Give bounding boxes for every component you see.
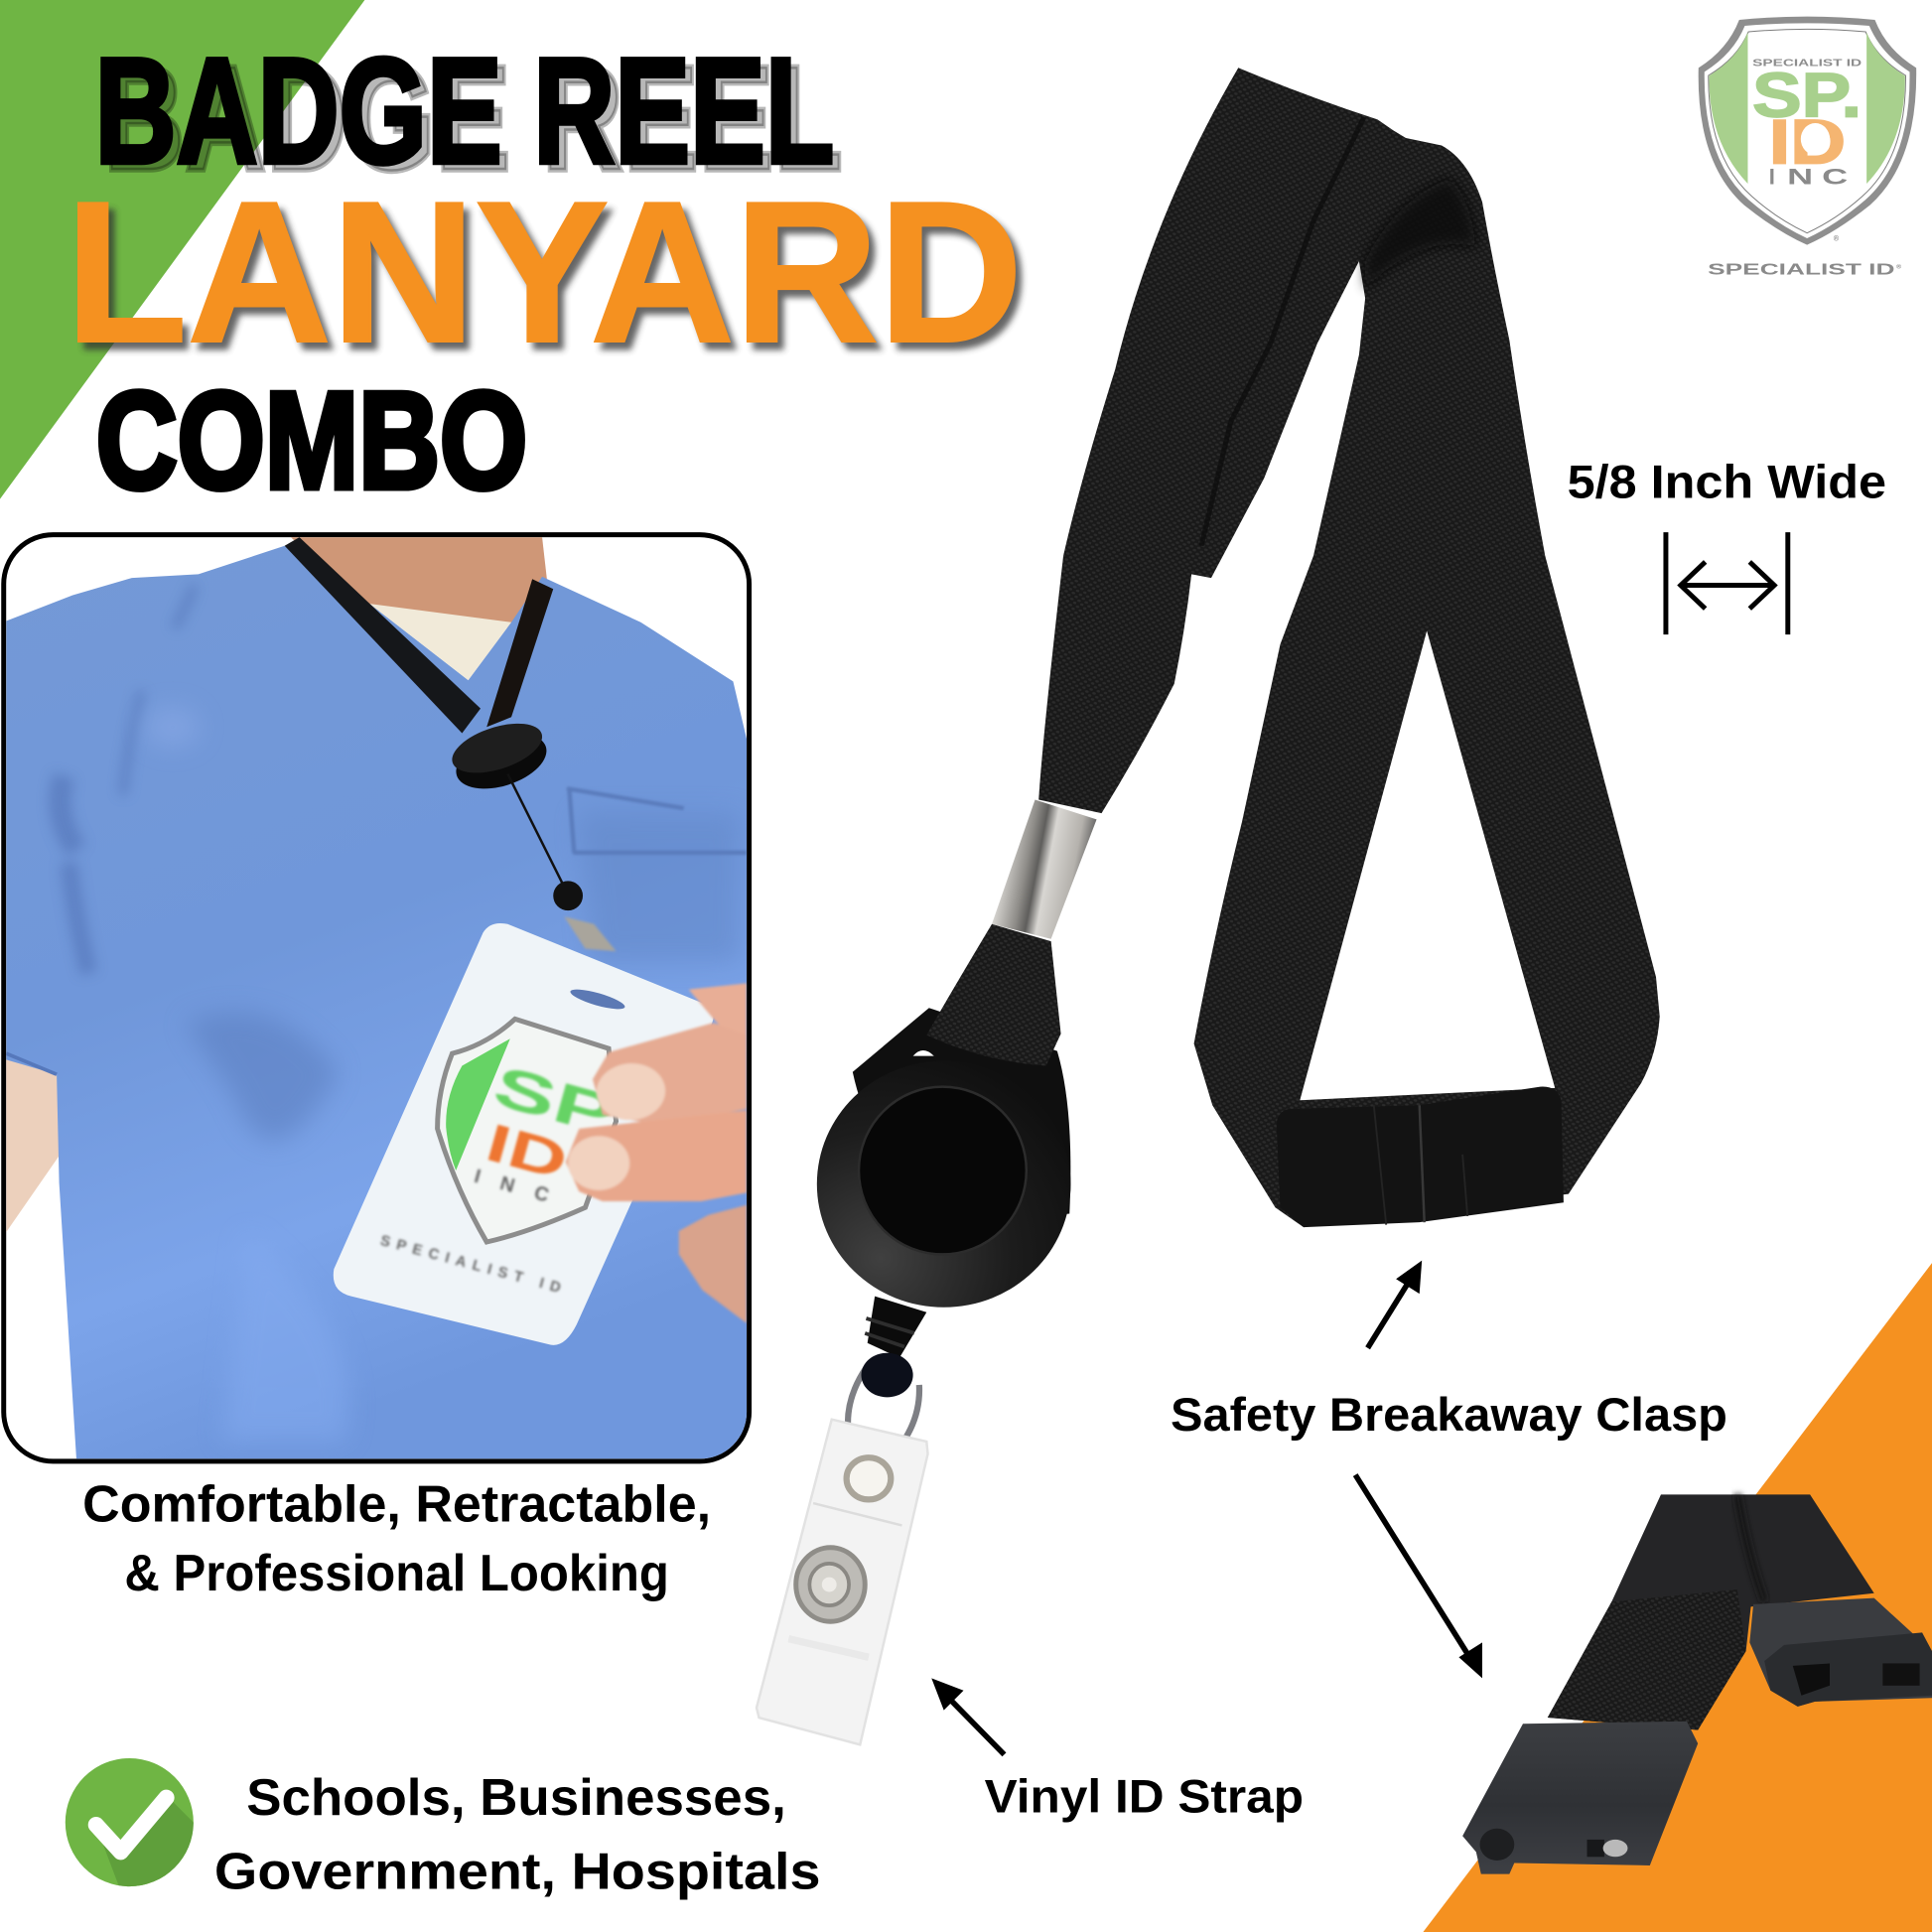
slot	[913, 1050, 934, 1056]
clasp close-up photo	[1462, 1494, 1932, 1874]
lanyard strap	[1038, 68, 1660, 1227]
scrub folds and shading	[6, 586, 740, 1442]
caption: uses: Schools, Businesses,	[246, 1769, 786, 1827]
orange corner triangle	[1423, 1263, 1932, 1932]
reel centre	[859, 1087, 1027, 1254]
vinyl id strap	[757, 1420, 928, 1744]
logo: specialist id shield: ID	[1769, 108, 1846, 178]
id card: SPECIALIST ID	[378, 1233, 563, 1297]
logo: specialist id shield: SPECIALIST ID	[1708, 261, 1894, 278]
close-up front clasp	[1462, 1722, 1698, 1874]
logo: specialist id shield: ®	[1834, 234, 1840, 243]
label: vinyl strap: Vinyl ID Strap	[985, 1770, 1304, 1823]
icon: green check	[66, 1758, 194, 1886]
t-shirt collar	[369, 604, 511, 680]
id card	[334, 923, 714, 1345]
title: COMBO	[96, 363, 527, 517]
title: LANYARD	[66, 160, 1023, 384]
label: breakaway clasp: Safety Breakaway Clasp	[1171, 1388, 1727, 1441]
reel cord	[511, 782, 564, 884]
arrow: down to close-up	[1355, 1475, 1482, 1678]
logo: specialist id shield: C	[1822, 164, 1848, 189]
icon: width dimension arrow	[1666, 532, 1788, 634]
id card: SP	[486, 1054, 622, 1148]
title	[66, 28, 1029, 517]
caption: uses	[214, 1769, 821, 1901]
close-up strap	[1548, 1494, 1874, 1729]
breakaway clasp on lanyard	[1277, 1087, 1564, 1227]
close-up back clasp	[1749, 1598, 1932, 1707]
id card: INC	[472, 1166, 551, 1207]
caption: professional: & Professional Looking	[124, 1545, 669, 1602]
logo: specialist id shield: N	[1787, 164, 1813, 189]
lanyard bands	[285, 537, 481, 733]
green corner triangle	[0, 0, 364, 499]
scrub top	[6, 546, 747, 1458]
reel teardrop back	[853, 1008, 1070, 1215]
arrow: vinyl strap	[931, 1678, 1004, 1754]
pocket seams	[567, 788, 747, 853]
logo: specialist id shield: SPECIALIST ID	[1752, 59, 1863, 69]
id card: ID	[480, 1113, 574, 1191]
fingers holding the card	[566, 983, 747, 1323]
neck skin	[291, 537, 548, 628]
eyelet	[847, 1457, 891, 1499]
reel body	[817, 1061, 1070, 1308]
reel neck	[868, 1297, 926, 1358]
metal ferrule	[992, 799, 1097, 939]
title: BADGE REEL	[95, 28, 834, 196]
panel: photo of person wearing lanyard	[4, 535, 750, 1461]
title: BADGE REEL	[103, 35, 843, 203]
caption: uses: Government, Hospitals	[214, 1844, 821, 1901]
label: width: 5/8 Inch Wide	[1568, 455, 1886, 507]
arrow: up to clasp	[1368, 1261, 1422, 1348]
logo: specialist id shield	[1699, 17, 1916, 278]
arm skin	[6, 1059, 62, 1232]
steel ring	[848, 1368, 919, 1468]
title: LANYARD	[71, 167, 1029, 391]
caption: comfortable: Comfortable, Retractable,	[82, 1476, 711, 1534]
bead	[862, 1353, 913, 1397]
strap to reel	[926, 924, 1061, 1066]
logo: specialist id shield: ®	[1896, 263, 1901, 271]
bead and clip	[553, 881, 583, 910]
logo: specialist id shield: I	[1769, 164, 1775, 189]
logo: specialist id shield: SP.	[1752, 61, 1862, 130]
snap button	[796, 1548, 865, 1621]
retractable badge reel	[817, 924, 1070, 1468]
retractable reel	[452, 723, 546, 788]
